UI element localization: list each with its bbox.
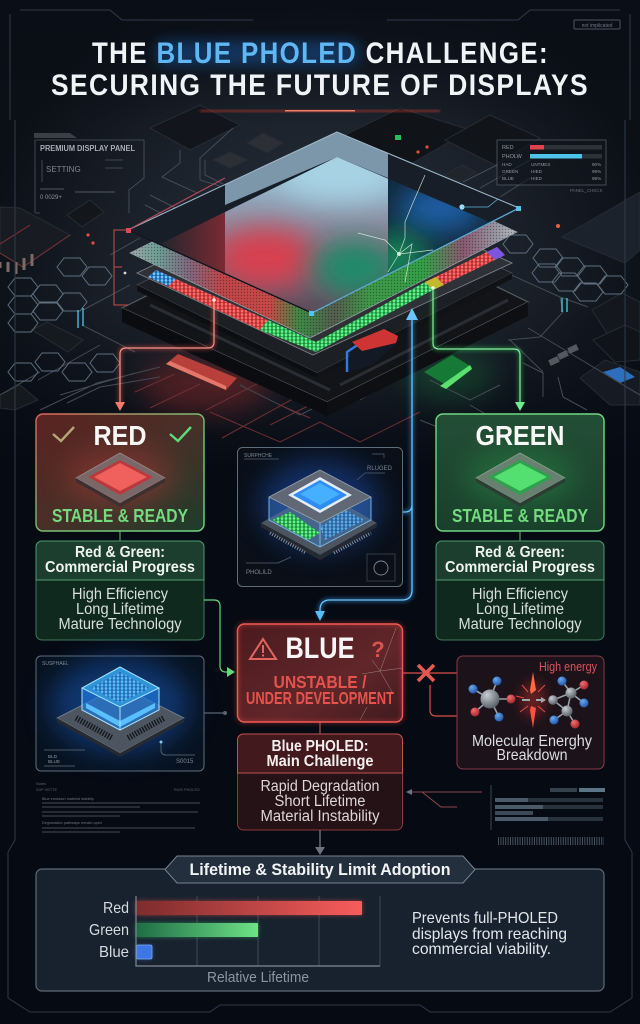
panel: centre chip illustration xyxy=(238,448,402,586)
note xyxy=(412,910,567,958)
panel: blue info: Rapid Degradation xyxy=(260,778,380,795)
panel: lifetime status hud: 98% xyxy=(592,176,601,181)
icon: green check xyxy=(170,427,191,441)
panel: centre chip illustration: RLUGED xyxy=(367,466,393,472)
bar chart: Red xyxy=(103,900,129,917)
panel: lifetime status hud: HAD xyxy=(502,162,512,167)
panel: premium display panel: 0 0029+ xyxy=(40,195,62,201)
icon: red chip xyxy=(76,453,165,507)
icon: tan check xyxy=(53,427,74,441)
hud text: lower left notes: XUP VETTE xyxy=(36,788,57,792)
panel: molecular breakdown: High energy xyxy=(539,660,598,674)
connector xyxy=(204,711,227,715)
panel: red info: Mature Technology xyxy=(58,616,182,633)
panel: red info: High Efficiency xyxy=(72,586,168,603)
label: unstable xyxy=(246,672,394,708)
panel: green status xyxy=(436,414,604,531)
label: unstable: UNDER DEVELOPMENT xyxy=(246,688,394,708)
panel: premium display panel xyxy=(34,133,144,213)
hud text: lower left notes: Blue emission material stability xyxy=(42,797,94,801)
arrow: from stats to blue info xyxy=(406,789,482,807)
panel: green info: Mature Technology xyxy=(458,616,582,633)
note: displays from reaching xyxy=(412,926,567,943)
heading banner xyxy=(165,856,475,883)
panel: red info: Red & Green: xyxy=(75,544,165,561)
background: hexagon grid xyxy=(8,235,628,381)
panel: blue info: Material Instability xyxy=(260,808,380,825)
panel: lifetime status hud: 99% xyxy=(592,169,601,174)
panel: green info: Red & Green: xyxy=(475,544,565,561)
icon: green chip xyxy=(476,453,565,507)
background: circuit board components xyxy=(0,105,640,410)
note: commercial viability. xyxy=(412,941,551,958)
connector: molecule to blue status xyxy=(403,665,457,716)
panel: premium display panel: PREMIUM DISPLAY PANEL xyxy=(40,144,135,153)
panel: molecular breakdown: Breakdown xyxy=(496,747,568,764)
arrow: green layer to green box xyxy=(431,286,525,411)
panel: left chip illustration: BLD xyxy=(48,754,58,759)
panel: blue info: Short Lifetime xyxy=(274,793,366,810)
panel: red info xyxy=(36,541,204,640)
connector ribbon xyxy=(347,328,400,372)
panel: lifetime status hud: HIED xyxy=(531,169,543,174)
icon: question mark: ? xyxy=(371,637,385,662)
panel: premium display panel: SETTING xyxy=(46,165,81,174)
panel: lifetime status hud: BLUE xyxy=(502,176,514,181)
background: circuit traces xyxy=(0,128,640,440)
glass crack xyxy=(358,175,433,282)
display stack xyxy=(122,120,528,416)
molecule: before xyxy=(468,676,516,722)
heading: blue: BLUE xyxy=(286,632,354,665)
panel: green info xyxy=(436,541,604,640)
pixel layer xyxy=(137,180,512,355)
dark layer xyxy=(137,190,512,378)
bar chart: Green xyxy=(89,922,129,939)
panel: lifetime status hud: GREEN xyxy=(502,169,518,174)
panel: left chip illustration: S0015 xyxy=(176,759,194,765)
frame tag xyxy=(574,20,620,29)
panel: blue info: Blue PHOLED: xyxy=(272,738,368,755)
hud text: lower left notes: Degradation pathways remain open xyxy=(42,821,102,825)
title underline glow xyxy=(200,110,440,112)
accent ticks xyxy=(78,298,567,328)
heading banner: Lifetime & Stability Limit Adoption xyxy=(190,860,450,879)
panel: lifetime status hud: RED xyxy=(502,145,514,151)
panel: left chip illustration: SUSPHAEL xyxy=(42,661,69,667)
icon: red x xyxy=(418,665,434,681)
note: Prevents full-PHOLED xyxy=(412,910,558,927)
heading: red: RED xyxy=(94,420,146,451)
connector xyxy=(119,531,121,541)
colour filter layer xyxy=(130,150,517,338)
panel: green info: High Efficiency xyxy=(472,586,568,603)
heading: green: GREEN xyxy=(476,420,564,451)
arrow: red layer to red box xyxy=(115,298,216,411)
hud text: lower left notes xyxy=(36,782,200,832)
icon: warning xyxy=(250,639,276,659)
connector: red info to blue status xyxy=(204,600,235,677)
panel: lifetime status hud: HIED xyxy=(531,176,543,181)
bar chart: Blue xyxy=(99,944,129,961)
arrow: blue feedback xyxy=(315,308,418,621)
panel: blue status xyxy=(238,624,403,722)
red bracket xyxy=(114,230,128,305)
molecule: after xyxy=(548,676,588,728)
label: unstable: UNSTABLE / xyxy=(274,672,367,692)
bar chart: Relative Lifetime xyxy=(207,970,309,986)
arrow: to lifetime panel xyxy=(315,830,325,855)
crack xyxy=(360,628,403,720)
panel: red status xyxy=(36,414,204,531)
glass panel xyxy=(126,131,521,316)
hud text: lower left notes: RUIX PHOLED xyxy=(174,788,200,792)
panel: blue info: Main Challenge xyxy=(266,753,374,770)
heat sink: green xyxy=(424,355,472,389)
panel: green info: Commercial Progress xyxy=(445,559,595,576)
title xyxy=(51,37,589,102)
panel: left chip illustration xyxy=(36,656,204,771)
panel: lifetime status hud: PHOLW xyxy=(502,154,523,160)
hud: lower right stat bars xyxy=(491,785,605,841)
panel: centre chip illustration: SURPHCHE xyxy=(244,453,273,459)
panel: green info: Long Lifetime xyxy=(476,601,564,618)
panel: left chip illustration: BLUE xyxy=(48,759,60,764)
panel: lifetime status hud: 90% xyxy=(592,162,601,167)
title: THE BLUE PHOLED CHALLENGE: xyxy=(92,37,549,70)
panel: red info: Commercial Progress xyxy=(45,559,195,576)
panel: red info: Long Lifetime xyxy=(76,601,164,618)
base plate xyxy=(122,205,528,416)
hud text: lower left notes: Notes xyxy=(36,782,46,786)
panel: molecular breakdown xyxy=(457,656,604,769)
label: stable and ready: STABLE & READY xyxy=(52,506,188,526)
icon: energy burst xyxy=(516,672,546,728)
panel: lifetime status hud: PANEL_CHECK xyxy=(570,188,603,193)
panel: molecular breakdown: Molecular Energhy xyxy=(472,733,592,750)
panel: lifetime and stability xyxy=(36,856,604,991)
panel: lifetime status hud: UNTMES xyxy=(531,162,550,167)
label: stable and ready: STABLE & READY xyxy=(452,506,588,526)
connector xyxy=(319,722,321,734)
panel: lifetime status hud xyxy=(497,140,606,193)
bar chart xyxy=(89,896,380,986)
frame tag: not implicated xyxy=(582,23,613,29)
connector xyxy=(519,531,521,541)
panel: centre chip illustration: PHOLILD xyxy=(246,570,272,576)
panel: blue info xyxy=(238,734,402,830)
heat sink: red xyxy=(166,354,237,390)
